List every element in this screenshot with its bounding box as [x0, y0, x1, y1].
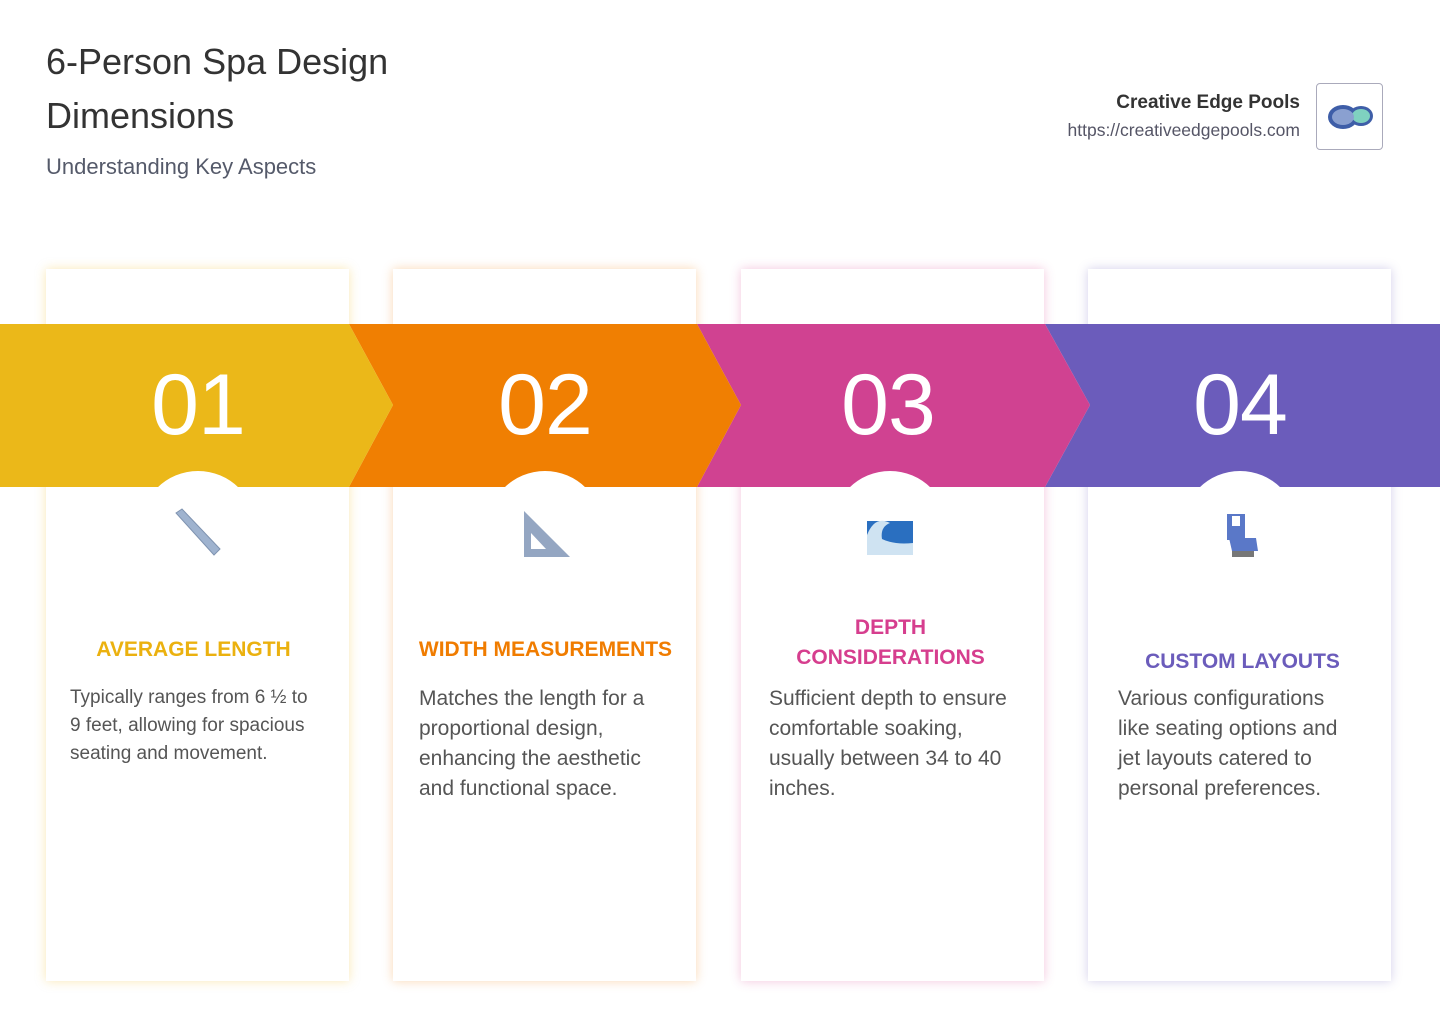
icon: ruler — [175, 508, 221, 556]
panel 3 text — [796, 616, 985, 669]
arrow band — [0, 324, 1440, 487]
card 3 — [741, 269, 1044, 981]
text: 02 — [498, 357, 592, 453]
panel 3 text: DEPTH — [855, 616, 926, 639]
circles — [140, 471, 256, 587]
text: Typically ranges from 6 ½ to 9 feet, allowing for spacious seating and movement. — [70, 687, 308, 764]
text: Sufficient depth to ensure comfortable soaking, usually between 34 to 40 inches. — [769, 687, 1007, 800]
icon: triangle ruler — [524, 511, 570, 557]
numbers: 01 — [151, 357, 245, 453]
panel 3 text: CONSIDERATIONS — [796, 646, 985, 669]
text: 04 — [1193, 357, 1287, 453]
text: Matches the length for a proportional design, enhancing the aesthetic and functional space. — [419, 687, 644, 800]
text: Various configurations like seating options and jet layouts catered to personal preferences. — [1118, 687, 1338, 800]
brand block: https://creativeedgepools.com — [1068, 120, 1300, 140]
text: 03 — [841, 357, 935, 453]
panel 4 text: CUSTOM LAYOUTS — [1145, 650, 1340, 673]
card 4 — [1088, 269, 1391, 981]
brand block — [1068, 92, 1300, 140]
panel 2 text: WIDTH MEASUREMENTS — [419, 638, 672, 661]
subtitle: Understanding Key Aspects — [46, 154, 316, 179]
title: 6-Person Spa Design — [46, 41, 388, 82]
panel 1 text: AVERAGE LENGTH — [96, 638, 291, 661]
card 1 — [46, 269, 349, 981]
card 2 — [393, 269, 696, 981]
icon: logo — [1316, 83, 1383, 150]
title: Dimensions — [46, 95, 234, 136]
brand block: Creative Edge Pools — [1116, 92, 1300, 113]
icon: wave — [867, 520, 913, 555]
title — [46, 41, 388, 136]
icon: seat — [1227, 514, 1258, 557]
